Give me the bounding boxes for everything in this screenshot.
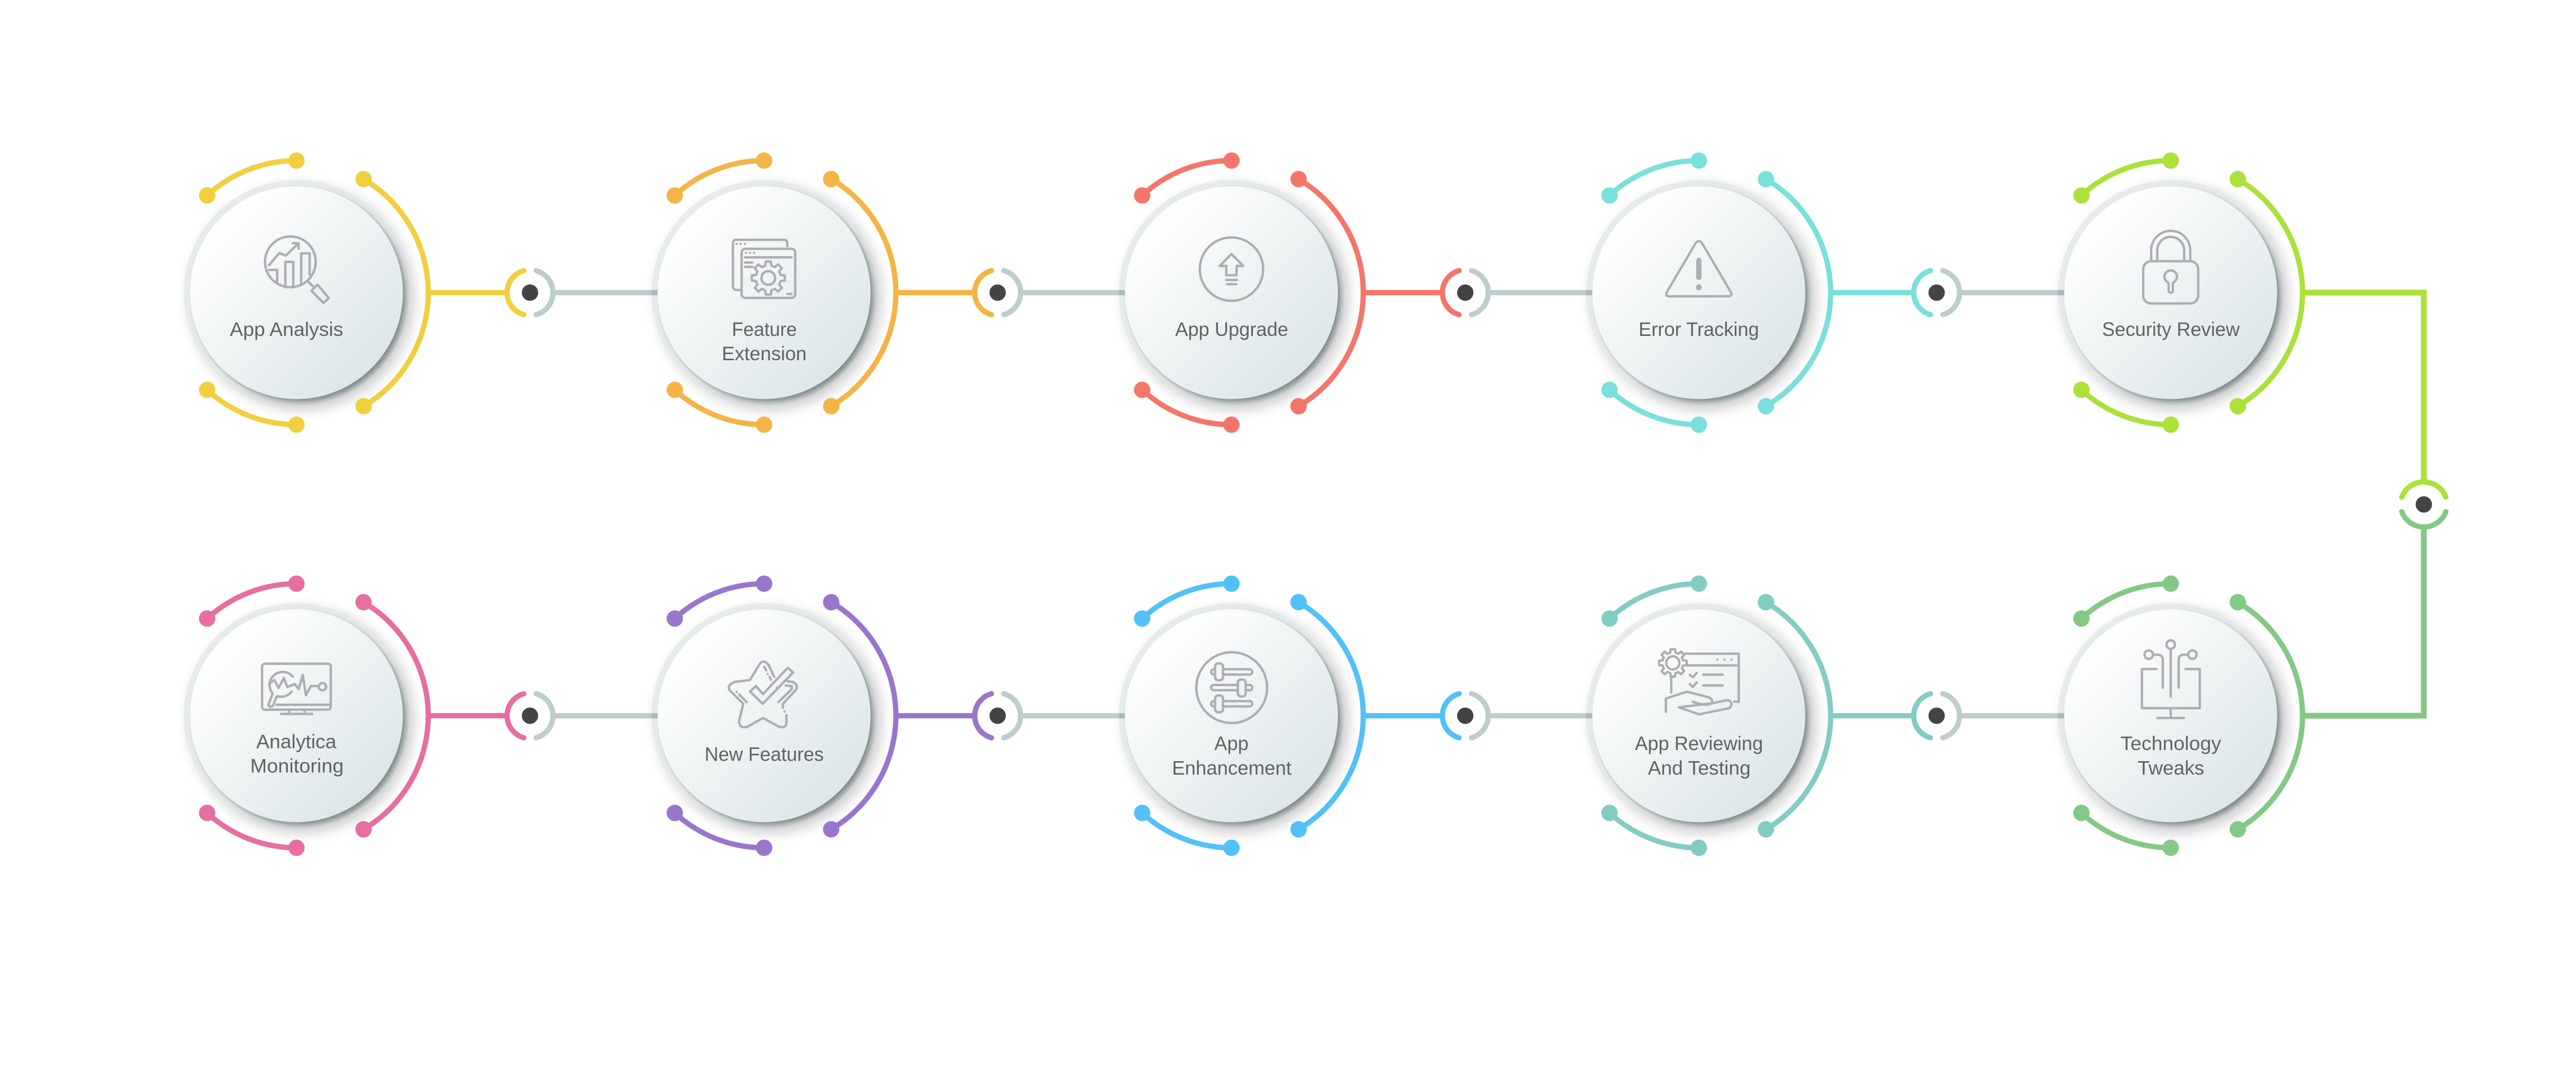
node: Error Tracking bbox=[1586, 152, 1830, 433]
node: Analytica Monitoring bbox=[184, 576, 428, 856]
icon: windows with gear bbox=[733, 240, 795, 298]
label: New Features: New Features bbox=[705, 744, 824, 765]
icon: warning triangle bbox=[1666, 241, 1732, 296]
node: App Reviewing And Testing bbox=[1586, 576, 1830, 856]
label: Error Tracking: Error Tracking bbox=[1639, 319, 1759, 340]
connector: Security Review to Technology Tweaks bbox=[2303, 293, 2446, 716]
node: App Upgrade bbox=[1119, 152, 1363, 433]
label: Feature Extension: Extension bbox=[722, 343, 806, 364]
icon: monitor with pulse and magnifier bbox=[262, 663, 331, 714]
connector: Error Tracking to Security Review bbox=[1831, 270, 2064, 315]
icon: upgrade arrow in circle bbox=[1199, 238, 1263, 301]
node: Technology Tweaks bbox=[2058, 576, 2302, 856]
label: App Enhancement: App bbox=[1214, 733, 1249, 754]
label: App Enhancement: Enhancement bbox=[1172, 757, 1292, 779]
icon: padlock bbox=[2143, 231, 2198, 303]
node: Security Review bbox=[2058, 152, 2302, 433]
connector: App Upgrade to Error Tracking bbox=[1363, 270, 1593, 315]
label: Analytica Monitoring: Monitoring bbox=[250, 755, 343, 776]
label: Technology Tweaks: Tweaks bbox=[2138, 757, 2205, 779]
label: Technology Tweaks bbox=[2121, 733, 2221, 779]
label: App Reviewing And Testing: And Testing bbox=[1648, 757, 1751, 779]
node: App Enhancement bbox=[1119, 576, 1363, 856]
label: App Analysis: App Analysis bbox=[230, 319, 343, 340]
connector: New Features to App Enhancement bbox=[896, 694, 1125, 738]
label: Analytica Monitoring bbox=[250, 731, 343, 776]
connector: App Enhancement to App Reviewing bbox=[1363, 694, 1593, 738]
label: Security Review: Security Review bbox=[2102, 319, 2240, 340]
label: App Reviewing And Testing: App Reviewing bbox=[1635, 733, 1763, 754]
connector: App Analysis to Feature Extension bbox=[429, 270, 657, 315]
icon: circuit monitor bbox=[2142, 640, 2200, 718]
node: App Analysis bbox=[184, 152, 428, 433]
label: Technology Tweaks: Technology bbox=[2121, 733, 2221, 754]
label: App Enhancement bbox=[1172, 733, 1292, 779]
label: App Upgrade: App Upgrade bbox=[1175, 319, 1288, 340]
icon: hand holding checklist and gear bbox=[1659, 649, 1738, 714]
icon: magnifier over bar chart bbox=[265, 237, 329, 303]
connector: Feature Extension to App Upgrade bbox=[896, 270, 1125, 315]
icon: star with checkmark bbox=[729, 661, 797, 727]
label: Feature Extension bbox=[722, 319, 806, 364]
connector: App Reviewing to Technology Tweaks bbox=[1831, 694, 2064, 738]
node: Feature Extension bbox=[652, 152, 896, 433]
connector: Analytica Monitoring to New Features bbox=[429, 694, 657, 738]
label: App Reviewing And Testing bbox=[1635, 733, 1763, 779]
label: Feature Extension: Feature bbox=[732, 319, 797, 340]
label: Analytica Monitoring: Analytica bbox=[256, 731, 337, 753]
node: New Features bbox=[652, 576, 896, 856]
icon: sliders in circle bbox=[1196, 652, 1267, 723]
